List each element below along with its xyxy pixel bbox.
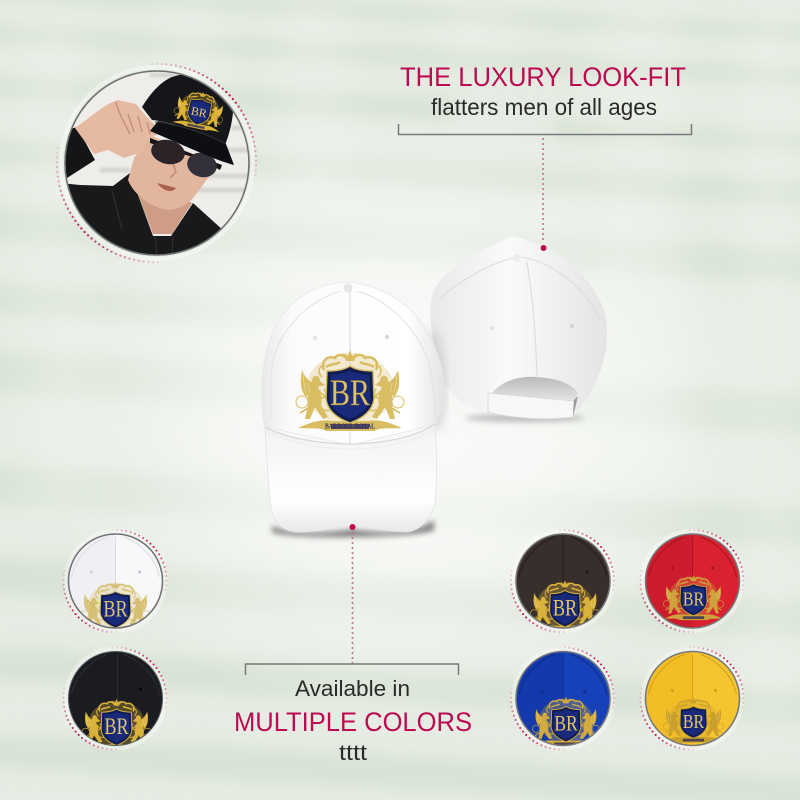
swatch: yellow cap: BR: [683, 711, 705, 733]
swatch: black cap: [63, 647, 167, 751]
headline: the luxury look-fit: [400, 62, 686, 120]
caption: multiple colors: [234, 676, 472, 765]
bracket and pointer: top: [398, 124, 692, 251]
seams and stitching: [349, 290, 351, 443]
swatch: red cap: BR: [683, 589, 705, 611]
crest: BR: [330, 373, 370, 414]
strap opening: [492, 377, 578, 400]
cap: [142, 74, 233, 145]
jacket: [68, 173, 221, 254]
product: front view of white cap with crest: [262, 282, 446, 537]
seams: [438, 257, 600, 377]
caption intro: Available in: [295, 676, 410, 701]
product: back view of white cap: [430, 236, 607, 422]
caption tail: tttt: [339, 740, 367, 765]
subheading text: flatters men of all ages: [431, 94, 657, 120]
heading text: THE LUXURY LOOK-FIT: [400, 62, 686, 92]
caption heading: MULTIPLE COLORS: [234, 707, 472, 737]
sunglasses: [150, 138, 222, 170]
swatch: black cap: BR: [104, 713, 129, 739]
swatch: yellow cap: [640, 647, 744, 750]
swatch: brown cap: BR: [553, 594, 578, 620]
cap crest: [172, 92, 223, 132]
brim: [265, 424, 436, 532]
crest: [296, 350, 404, 431]
swatch: white cap: BR: [103, 595, 128, 621]
swatch: brown cap: [511, 530, 614, 632]
swatch: blue cap: [511, 647, 614, 750]
cap crest: BR: [190, 104, 208, 121]
swatch: red cap: [640, 530, 744, 632]
crest: BARDOUL ROYAL: [325, 422, 375, 430]
pointer: bottom: [246, 524, 458, 675]
hand: [75, 100, 158, 158]
portrait: man wearing black cap: [57, 64, 256, 262]
neck and face: [138, 194, 192, 234]
swatch: blue cap: BR: [554, 711, 578, 736]
swatch: white cap: [63, 530, 167, 633]
